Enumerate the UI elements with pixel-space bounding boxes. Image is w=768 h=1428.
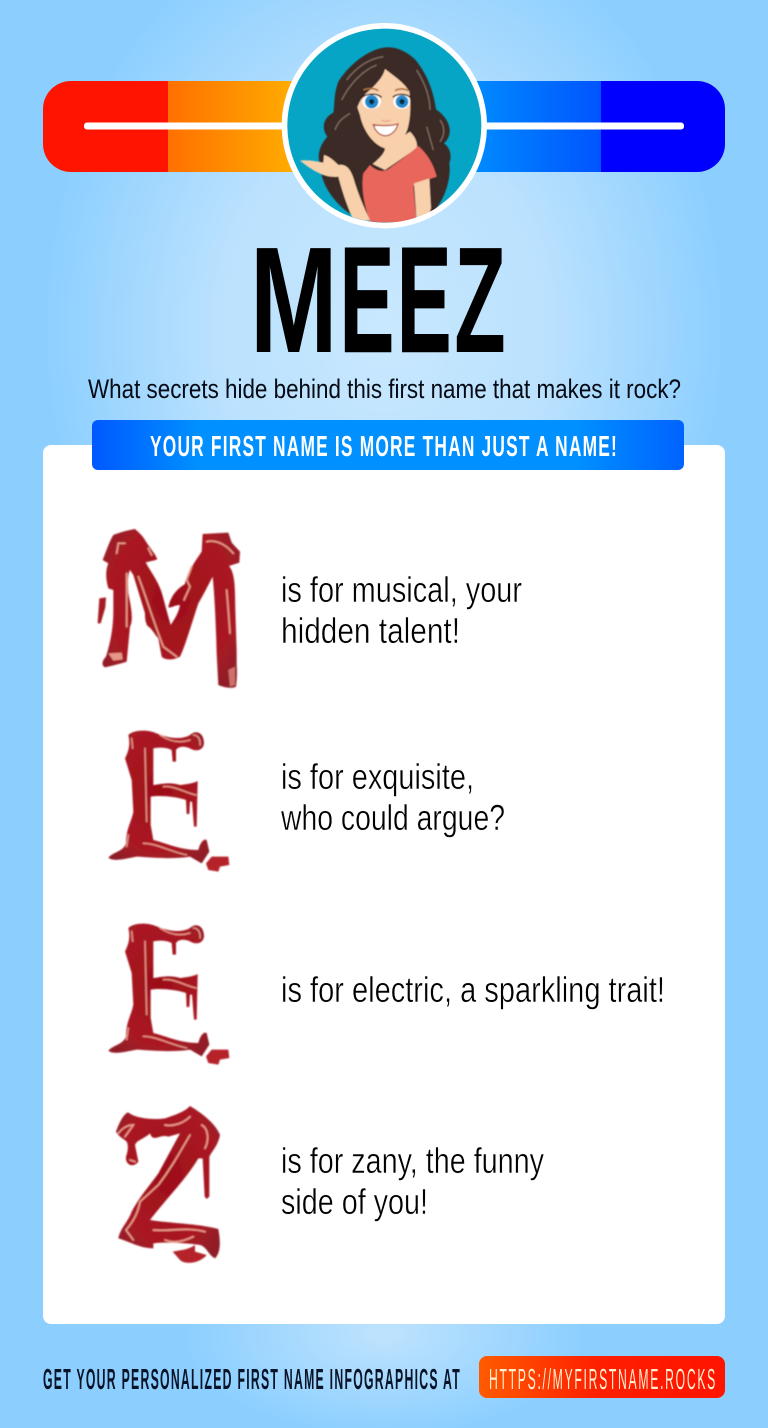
white horizontal line (84, 122, 684, 130)
second letter E in dripping blood (108, 924, 229, 1065)
title: E (397, 216, 451, 384)
text: Z line two: side of you! (281, 1181, 428, 1222)
title: M (250, 215, 338, 384)
title: Z (454, 215, 506, 384)
hair (319, 47, 451, 215)
right gradient bar (470, 81, 725, 172)
text: E line two: who could argue? (280, 797, 505, 838)
letter E in dripping blood (108, 731, 229, 872)
text: M line: is for musical, your (281, 569, 522, 610)
text: second E line: is for electric, a sparkling trait! (281, 969, 665, 1010)
white content panel (43, 445, 725, 1324)
letter Z in dripping blood (116, 1106, 220, 1263)
smile (373, 124, 398, 136)
text: Z line: is for zany, the funny (281, 1140, 544, 1181)
title: E (340, 216, 394, 384)
eyes (361, 89, 411, 109)
shirt (363, 146, 437, 223)
banner (92, 420, 684, 470)
letter M in dripping blood (98, 529, 240, 688)
neck and face (357, 69, 417, 170)
avatar: cartoon woman in circle (282, 23, 487, 228)
title (250, 215, 506, 384)
text: M line two: hidden talent! (281, 610, 460, 651)
footer url button (479, 1356, 725, 1398)
left gradient bar (43, 81, 303, 172)
text: E line: is for exquisite, (281, 756, 474, 797)
arm and hand (300, 155, 370, 223)
